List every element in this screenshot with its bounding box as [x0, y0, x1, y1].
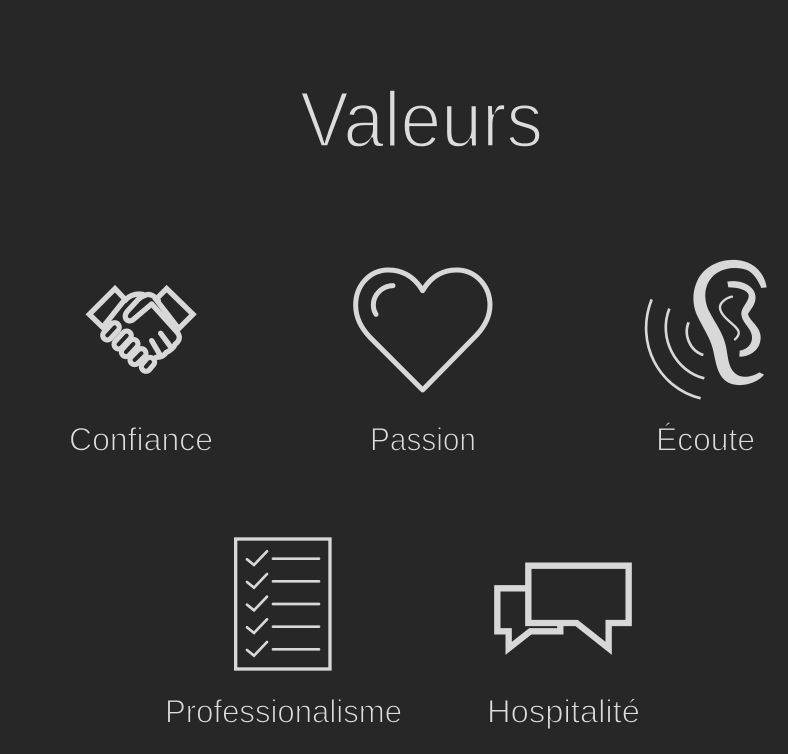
sound waves: [687, 322, 703, 355]
icon: handshake: [89, 289, 193, 367]
icon: speech bubbles: [497, 566, 629, 648]
ear inner curl: [720, 297, 739, 339]
label: Hospitalité: Hospitalité: [487, 694, 640, 730]
label: Professionalisme: Professionalisme: [165, 694, 402, 730]
ear inner fold: [727, 281, 761, 357]
ear outer helix: [693, 260, 767, 385]
label: Confiance: Confiance: [69, 422, 213, 458]
icon: heart: [356, 270, 490, 390]
label: Passion: Passion: [370, 422, 476, 458]
title: Valeurs: [300, 74, 543, 164]
icon: checklist: [236, 539, 330, 669]
fingers: [107, 327, 150, 367]
label: Écoute: Écoute: [656, 422, 755, 458]
icon: ear: [646, 260, 767, 398]
